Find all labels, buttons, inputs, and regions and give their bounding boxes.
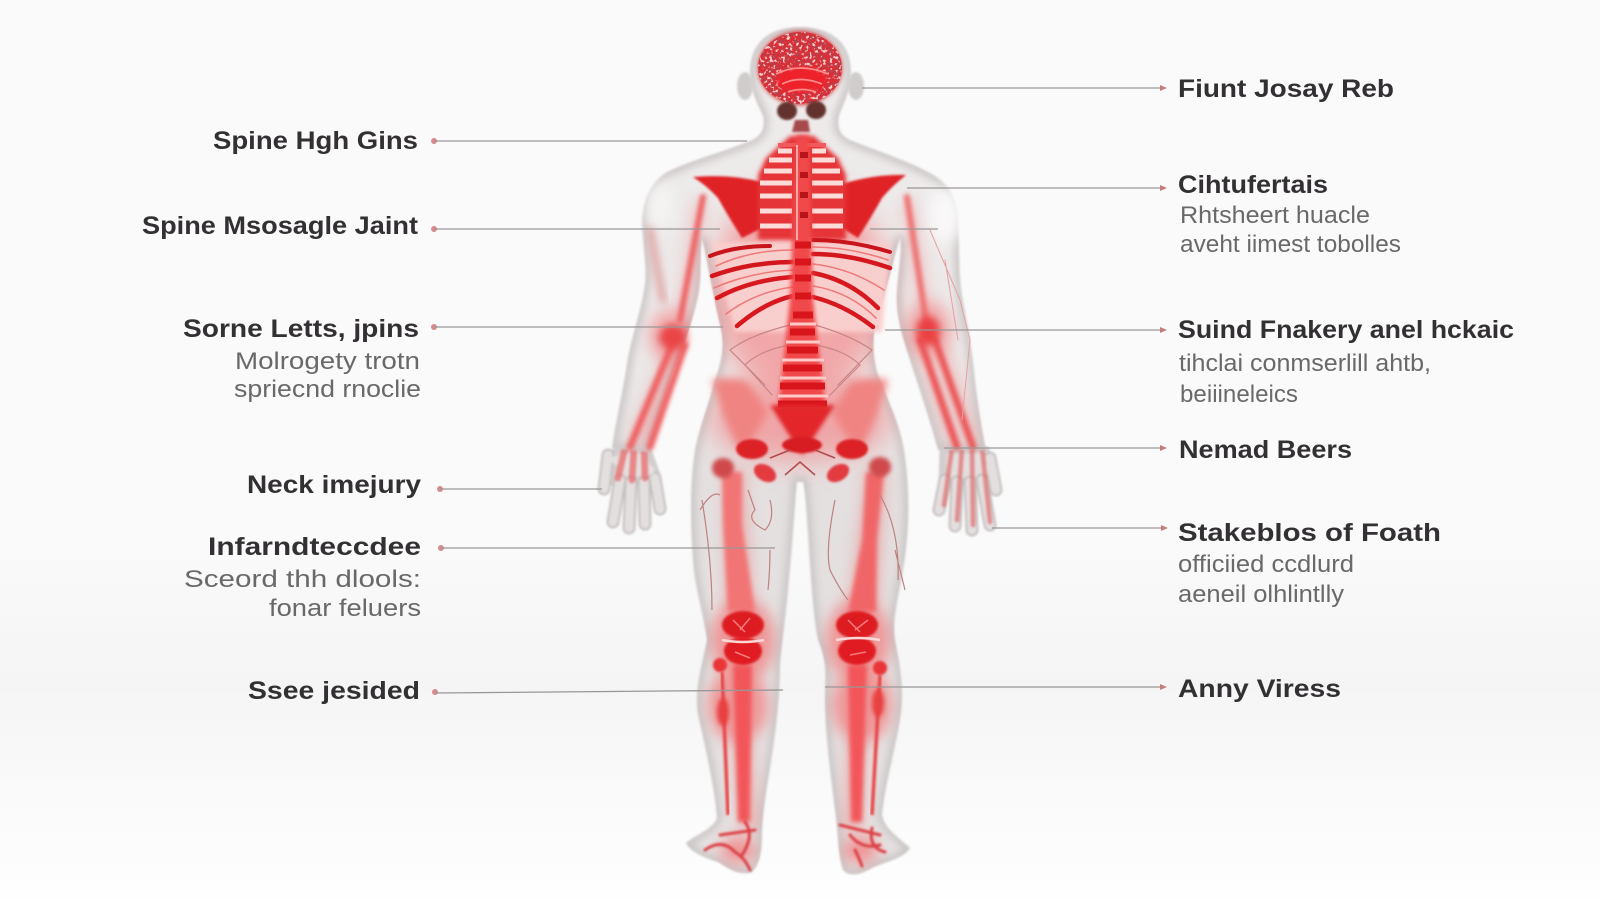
callout: Infarndteccdee: Sceord thh dlools: xyxy=(184,566,421,593)
callout: Stakeblos of Foath xyxy=(992,519,1441,608)
skull base xyxy=(777,101,826,132)
callout: Ssee jesided xyxy=(248,677,783,705)
scapulae xyxy=(693,175,906,238)
leg bones xyxy=(700,457,905,822)
callout: Spine Hgh Gins xyxy=(213,127,747,155)
callout: Neck imejury xyxy=(247,471,602,499)
arm bones xyxy=(630,197,973,447)
knee joints xyxy=(722,611,880,665)
callout: Spine Msosagle Jaint xyxy=(142,212,938,240)
callout: Nemad Beers: Nemad Beers xyxy=(1179,436,1352,464)
human body figure xyxy=(604,27,996,874)
callout: Suind Fnakery anel hckaic xyxy=(885,316,1514,408)
callout: Sorne Letts, jpins: Molrogety trotn xyxy=(235,348,420,375)
brain xyxy=(756,30,844,106)
callout: Fiunt Josay Reb: Fiunt Josay Reb xyxy=(1178,75,1394,103)
callout: Nemad Beers xyxy=(944,436,1352,464)
callout: Stakeblos of Foath: Stakeblos of Foath xyxy=(1178,519,1441,547)
spine xyxy=(778,135,828,450)
callout: Sorne Letts, jpins xyxy=(183,315,723,403)
callout: Anny Viress: Anny Viress xyxy=(1178,675,1341,703)
callout: Neck imejury: Neck imejury xyxy=(247,471,421,499)
pelvis xyxy=(712,378,888,486)
callout: Cihtufertais: Rhtsheert huacle xyxy=(1180,202,1370,229)
upper ribs xyxy=(758,136,846,240)
callout: Cihtufertais: Cihtufertais xyxy=(1178,171,1328,199)
callout: Stakeblos of Foath: aeneil olhlintlly xyxy=(1178,581,1344,608)
right hand xyxy=(939,448,996,530)
callout: Suind Fnakery anel hckaic: tihclai conmserlill ahtb, xyxy=(1179,350,1431,377)
callout: Cihtufertais xyxy=(907,171,1401,258)
callout: Anny Viress xyxy=(825,675,1341,703)
callout: Ssee jesided: Ssee jesided xyxy=(248,677,420,705)
callout: Infarndteccdee: Infarndteccdee xyxy=(208,533,421,561)
soft red glows clipped to body xyxy=(635,185,975,864)
foot bones xyxy=(705,822,885,870)
callout: Spine Hgh Gins: Spine Hgh Gins xyxy=(213,127,418,155)
lower ribs xyxy=(710,240,890,395)
callout: Spine Msosagle Jaint: Spine Msosagle Jaint xyxy=(142,212,419,240)
callout: Suind Fnakery anel hckaic: beiiineleics xyxy=(1180,381,1298,408)
callout: Sorne Letts, jpins: spriecnd rnoclie xyxy=(234,376,421,403)
callout: Sorne Letts, jpins: Sorne Letts, jpins xyxy=(183,315,419,343)
body silhouette xyxy=(612,27,986,874)
callout: Stakeblos of Foath: officiied ccdlurd xyxy=(1178,551,1354,578)
callout: Suind Fnakery anel hckaic: Suind Fnakery anel hckaic xyxy=(1178,316,1514,344)
callout: Fiunt Josay Reb xyxy=(862,75,1394,103)
callout: Infarndteccdee xyxy=(184,533,775,622)
callout: Cihtufertais: aveht iimest tobolles xyxy=(1180,231,1401,258)
left hand xyxy=(604,448,660,528)
ears xyxy=(737,72,864,100)
callout: Infarndteccdee: fonar feluers xyxy=(269,595,421,622)
